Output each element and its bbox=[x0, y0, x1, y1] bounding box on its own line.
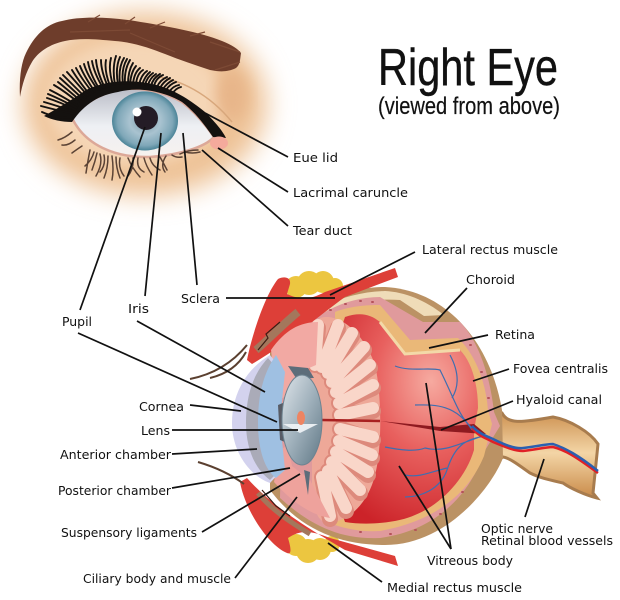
retina layer bbox=[335, 305, 492, 531]
eyeball white bbox=[72, 89, 214, 157]
extraocular muscles bbox=[190, 268, 398, 566]
optic nerve bbox=[480, 408, 598, 498]
title bbox=[378, 39, 560, 120]
label: suspensory ligaments: Suspensory ligaments bbox=[61, 525, 197, 540]
choroid layer bbox=[280, 297, 500, 538]
skin shading bbox=[23, 12, 267, 196]
label: anterior chamber: Anterior chamber bbox=[60, 447, 172, 462]
lacrimal caruncle bbox=[210, 136, 228, 150]
label: lens: Lens bbox=[141, 423, 170, 438]
ciliary folds bbox=[312, 317, 380, 522]
retinal vessels bbox=[385, 355, 484, 497]
vitreous body bbox=[310, 314, 478, 524]
hyaloid canal bbox=[380, 421, 486, 434]
leader lines bbox=[78, 113, 544, 582]
label: posterior chamber: Posterior chamber bbox=[58, 483, 172, 498]
lens bbox=[282, 375, 322, 465]
label: ciliary body and muscle: Ciliary body and muscle bbox=[83, 571, 231, 586]
label: vitreous body: Vitreous body bbox=[427, 553, 514, 568]
upper lashes bbox=[41, 56, 181, 118]
label: retina: Retina bbox=[495, 327, 535, 342]
pink ciliary tissue bbox=[271, 322, 330, 518]
label: eye lid: Eue lid bbox=[293, 150, 338, 165]
iris bbox=[112, 92, 178, 150]
sclera cream layer bbox=[275, 291, 444, 345]
label: medial rectus muscle: Medial rectus muscle bbox=[387, 580, 522, 595]
label: fovea centralis: Fovea centralis bbox=[513, 361, 608, 376]
iris highlight bbox=[132, 108, 142, 116]
label: choroid: Choroid bbox=[466, 272, 515, 287]
retinal blood vessels bbox=[472, 426, 598, 473]
fat pads bbox=[285, 271, 343, 563]
choroid dots bbox=[330, 301, 489, 534]
sclera outer layer bbox=[270, 287, 503, 545]
upper eyelash band bbox=[44, 81, 226, 138]
label: hyaloid canal: Hyaloid canal bbox=[516, 392, 602, 407]
external eye illustration bbox=[20, 12, 267, 196]
eyebrow hairs bbox=[70, 15, 240, 70]
label: lateral rectus muscle: Lateral rectus muscle bbox=[422, 242, 558, 257]
lower lashes bbox=[58, 132, 200, 180]
label: tear duct: Tear duct bbox=[292, 223, 352, 238]
label: retinal blood vessels: Retinal blood vessels bbox=[481, 533, 613, 548]
heading: Right Eye: Right Eye bbox=[378, 39, 558, 97]
eyeball cross-section bbox=[190, 268, 598, 566]
cornea bbox=[232, 355, 285, 483]
labels bbox=[58, 150, 613, 595]
subheading: viewed from above: (viewed from above) bbox=[378, 93, 560, 120]
label: sclera: Sclera bbox=[181, 291, 220, 306]
eyebrow bbox=[20, 18, 241, 97]
pupil bbox=[134, 106, 158, 130]
notch highlight bbox=[380, 322, 460, 354]
label: iris: Iris bbox=[128, 301, 149, 316]
label: cornea: Cornea bbox=[139, 399, 184, 414]
label: optic nerve: Optic nerve bbox=[481, 521, 553, 536]
suspensory ligaments bbox=[288, 366, 314, 495]
iris cross-section bbox=[278, 400, 292, 445]
eyelid crease bbox=[150, 76, 232, 122]
label: pupil: Pupil bbox=[62, 314, 92, 329]
label: lacrimal caruncle: Lacrimal caruncle bbox=[293, 185, 408, 200]
